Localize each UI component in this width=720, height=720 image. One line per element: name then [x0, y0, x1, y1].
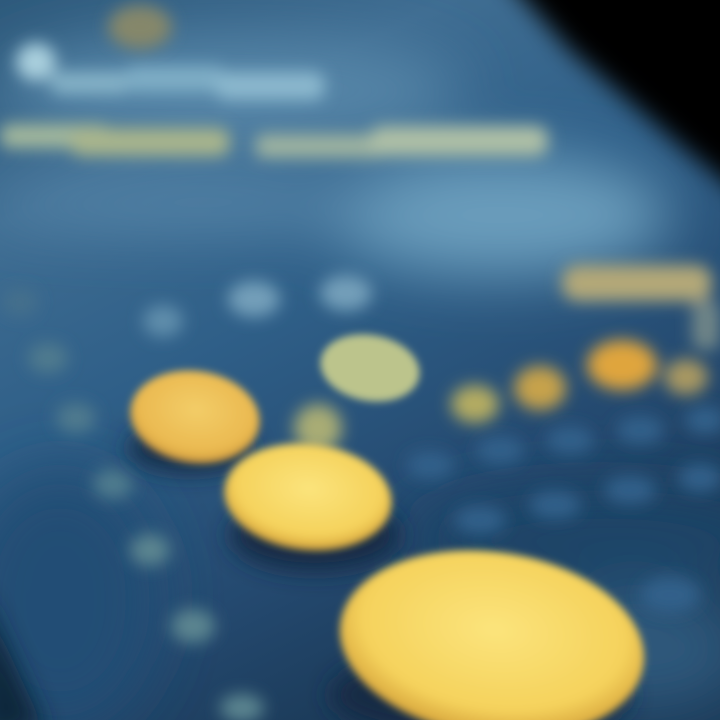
keypad dots right: [406, 406, 720, 613]
blurred label right: [562, 265, 720, 350]
coin shadows: [128, 424, 630, 720]
large gold coin bottom: [328, 532, 656, 720]
gold coin centre: [219, 436, 397, 558]
small coin behind: [294, 404, 342, 452]
small gold dots row: [451, 340, 708, 423]
dark corner bottom left: [0, 590, 45, 720]
blurred coin top: [108, 5, 172, 49]
pale coin middle: [315, 327, 425, 409]
dark corner top right: [490, 0, 720, 210]
blurred subtitle line: [0, 124, 548, 158]
gold coin left: [124, 362, 266, 472]
blurred title line: [16, 43, 325, 100]
small pale dots: [2, 275, 372, 720]
